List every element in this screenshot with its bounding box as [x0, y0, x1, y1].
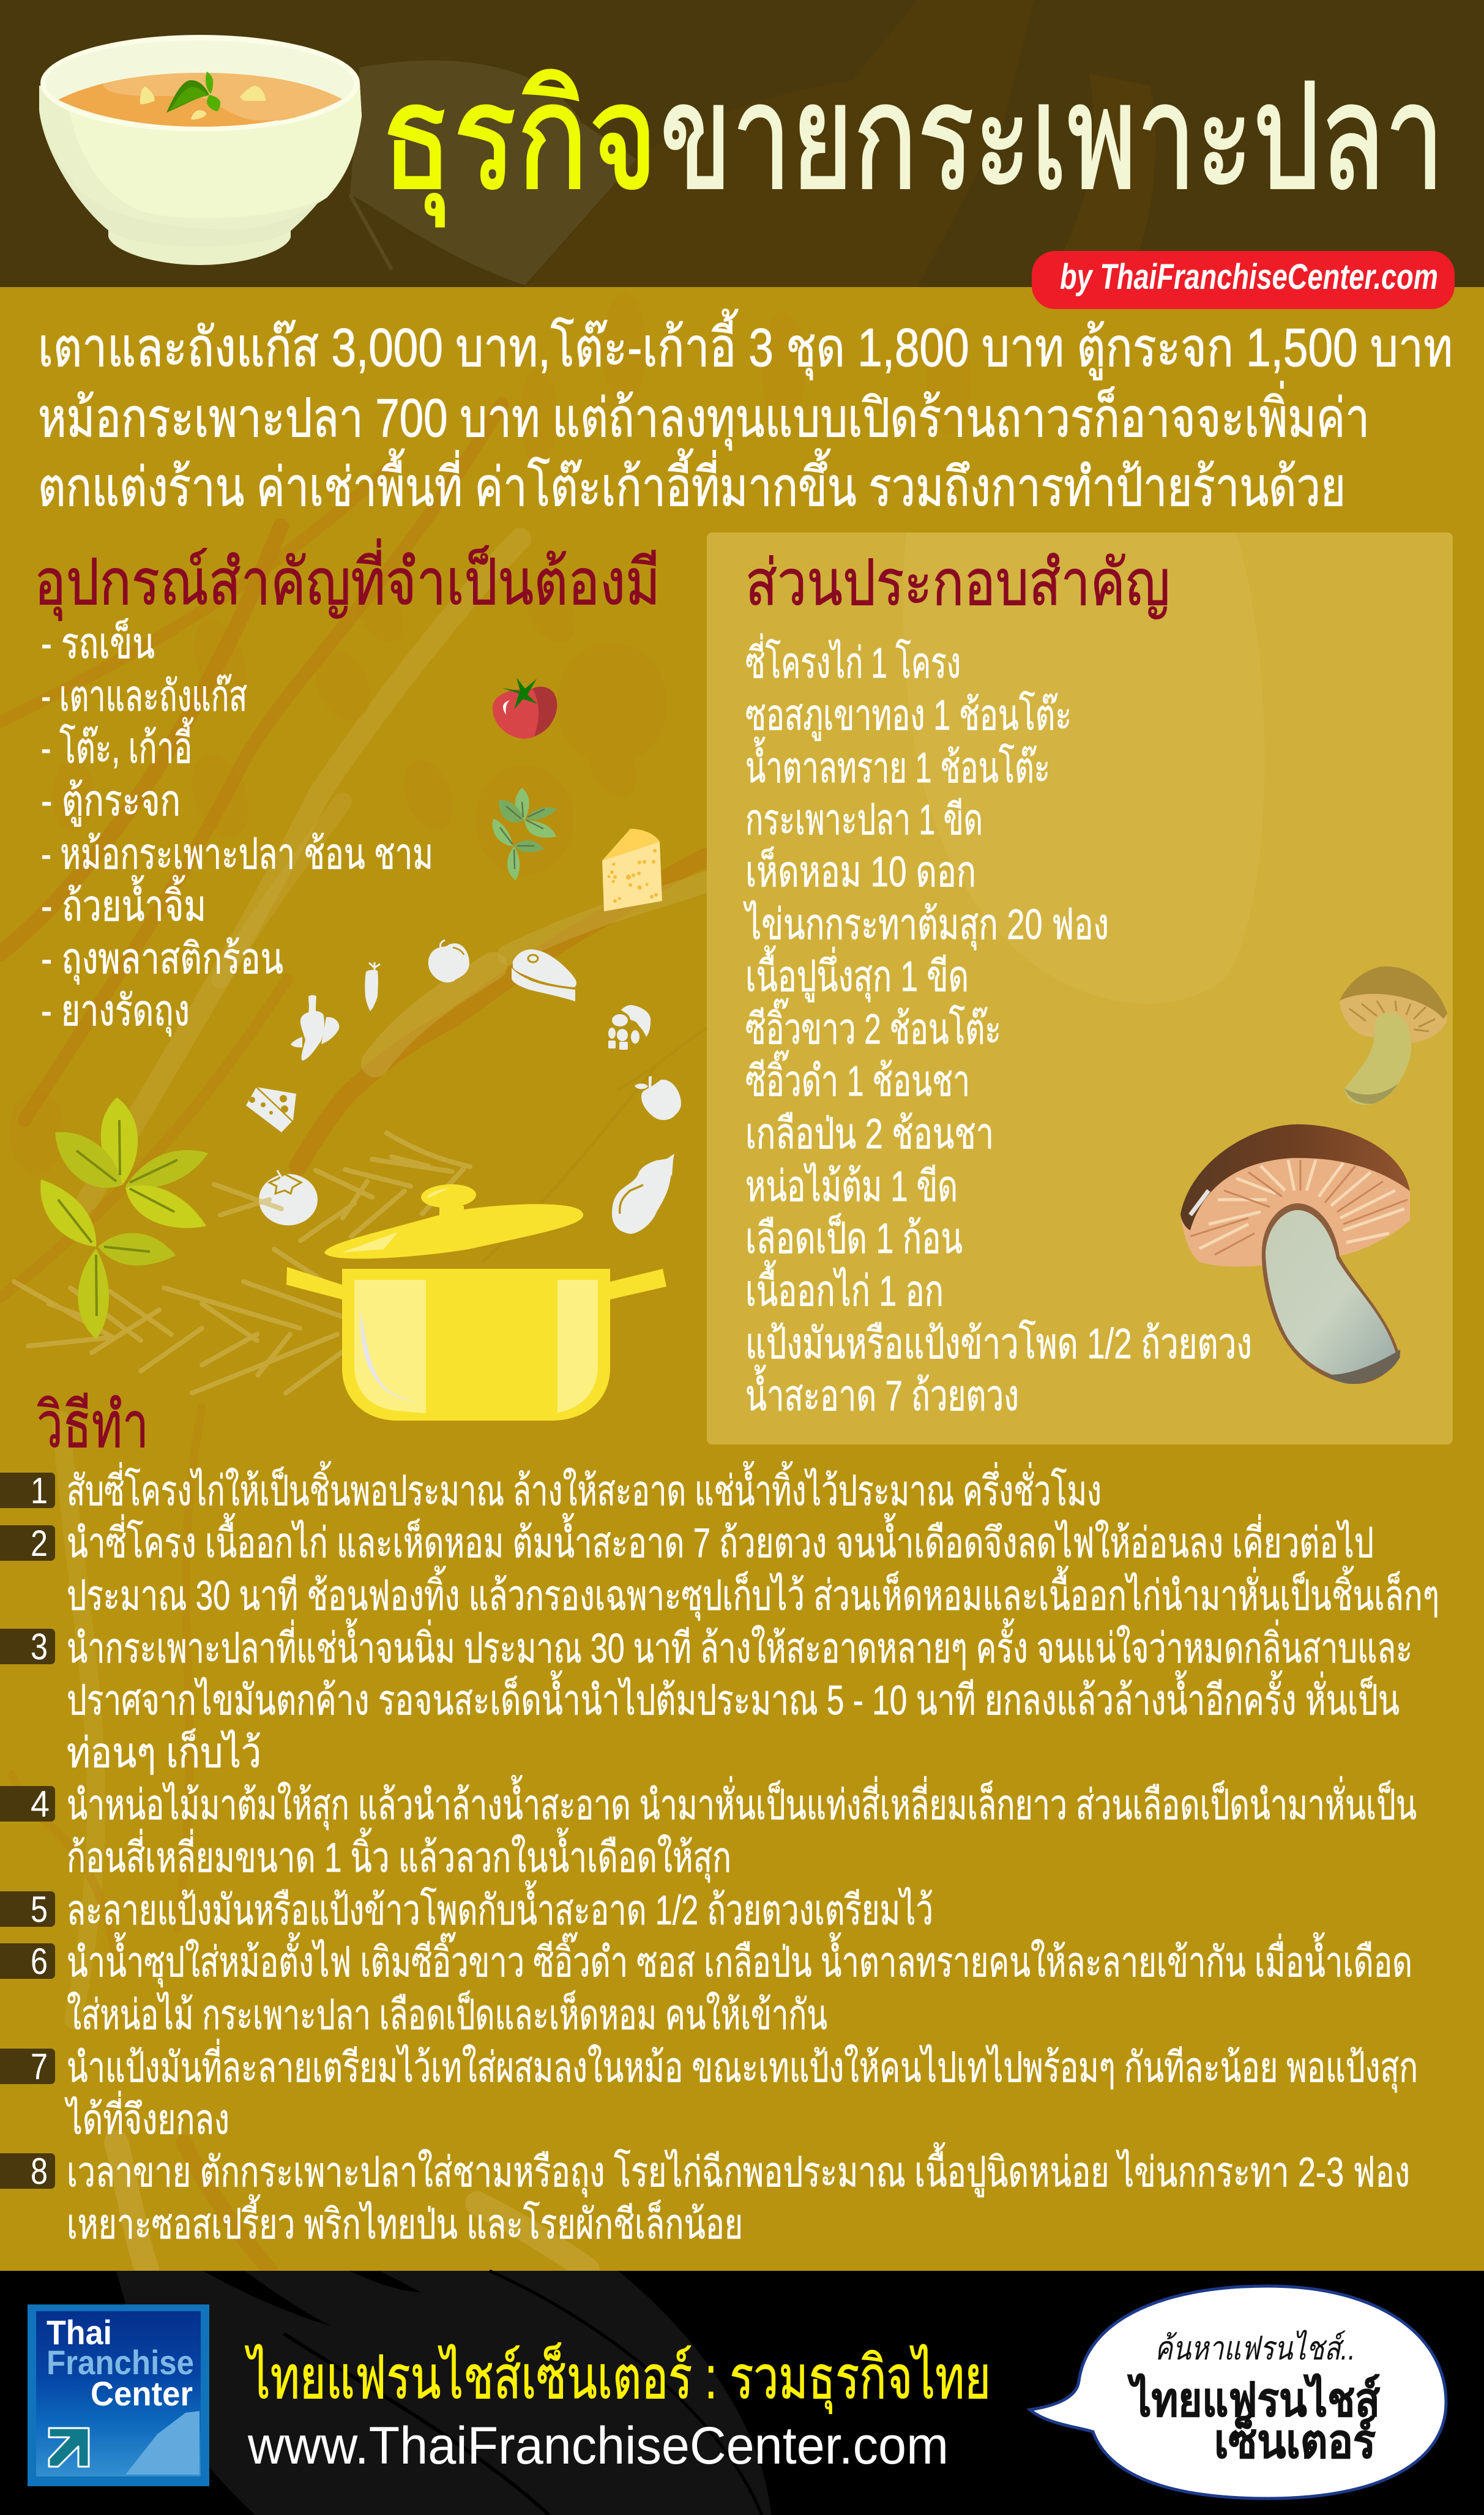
- heading: equipment: อุปกรณ์สำคัญที่จำเป็นต้องมี: [34, 539, 660, 621]
- icon: green herb leaves: [493, 788, 557, 880]
- step text: สับซี่โครงไก่ให้เป็นชิ้นพอประมาณ ล้างให้สะอาด แช่น้ำทิ้งไว้ประมาณ ครึ่งชั่วโมง: [67, 1461, 1102, 1514]
- logo wordmark: Thai: [47, 2313, 112, 2352]
- icon: carrot: [365, 962, 380, 1011]
- footer website url: www.ThaiFranchiseCenter.com: [247, 2416, 949, 2475]
- step number badges: 4: [31, 1784, 50, 1825]
- background watermark: stems and seeds: [0, 404, 707, 2270]
- icon: apple: [635, 1076, 681, 1120]
- ingredient items: ไข่นกกระทาต้มสุก 20 ฟอง: [743, 900, 1109, 951]
- icon: cheese wedge: [602, 829, 662, 911]
- icon: fruit: [428, 940, 469, 982]
- panel: ingredients: [707, 533, 1453, 1444]
- step text: ใส่หน่อไม้ กระเพาะปลา เลือดเป็ดและเห็ดหอม คนให้เข้ากัน: [67, 1990, 827, 2038]
- panel: equipment list: [34, 539, 660, 1037]
- bowl rim: [40, 35, 360, 132]
- rosemary sprigs: [14, 1133, 470, 1393]
- bubble text bold: [1127, 2373, 1381, 2468]
- equipment items: - ถ้วยน้ำจิ้ม: [41, 875, 206, 930]
- ingredient items: ซีอิ๊วดำ 1 ช้อนชา: [745, 1050, 970, 1105]
- equipment items: - โต๊ะ, เก้าอี้: [41, 717, 194, 772]
- step number badges: [0, 1470, 55, 2192]
- ingredient items: น้ำสะอาด 7 ถ้วยตวง: [745, 1364, 1019, 1419]
- intro text: [38, 309, 1453, 517]
- logo arrow: [49, 2428, 89, 2467]
- ingredient items: เนื้ออกไก่ 1 อก: [745, 1260, 944, 1315]
- heading: method: วิธีทำ: [37, 1390, 149, 1461]
- pot lid: [324, 1183, 583, 1258]
- icon: chili pepper: [291, 995, 339, 1061]
- icon: tomato outline: [259, 1170, 318, 1225]
- red byline pill: [1032, 251, 1455, 309]
- soup: [58, 73, 342, 127]
- speech bubble: [1030, 2286, 1446, 2498]
- background watermark: seeds: [10, 294, 971, 1175]
- equipment items: [41, 618, 433, 1037]
- bowl foot: [108, 228, 291, 265]
- icon: small mushroom: [1340, 966, 1447, 1105]
- header band: [0, 0, 1484, 287]
- ingredient items: ซีอิ๊วขาว 2 ช้อนโต๊ะ: [745, 998, 1001, 1053]
- step number badges: 1: [31, 1470, 48, 1511]
- ingredient items: [743, 633, 1252, 1419]
- step text: เหยาะซอสเปรี้ยว พริกไทยป่น และโรยผักชีเล็กน้อย: [67, 2194, 743, 2248]
- bowl icon: [39, 35, 362, 265]
- icon: large mushroom: [1180, 1124, 1410, 1384]
- pot handles: [286, 1267, 666, 1299]
- title: ธุรกิจ: [381, 55, 658, 226]
- icon: basil leaves: [40, 1097, 208, 1339]
- step text: ละลายแป้งมันหรือแป้งข้าวโพดกับน้ำสะอาด 1/2 ถ้วยตวงเตรียมไว้: [67, 1880, 933, 1934]
- header watermark: [350, 0, 1155, 287]
- footer band: [0, 2271, 1484, 2515]
- equipment items: - ยางรัดถุง: [41, 987, 190, 1037]
- heading: ingredients: ส่วนประกอบสำคัญ: [745, 548, 1170, 619]
- logo wordmark: Center: [91, 2374, 193, 2413]
- equipment items: - ถุงพลาสติกร้อน: [41, 935, 283, 985]
- ingredient items: เลือดเป็ด 1 ก้อน: [745, 1213, 963, 1262]
- step number badges: 7: [31, 2046, 48, 2087]
- ingredient items: หน่อไม้ต้ม 1 ขีด: [745, 1162, 958, 1210]
- step number badges: 3: [31, 1626, 48, 1667]
- panel: method steps: [0, 1461, 1439, 2248]
- icon: steak: [512, 949, 576, 1001]
- ingredient items: กระเพาะปลา 1 ขีด: [745, 796, 983, 843]
- logo: [28, 2304, 209, 2486]
- ingredient items: ซอสภูเขาทอง 1 ช้อนโต๊ะ: [745, 690, 1072, 741]
- white ingredient icons: [246, 940, 681, 1234]
- step number badges: 8: [31, 2151, 48, 2192]
- bubble text small: ค้นหาแฟรนไชส์..: [1155, 2330, 1355, 2367]
- equipment items: - รถเข็น: [41, 618, 155, 667]
- step number badges: 6: [31, 1941, 48, 1982]
- step text: ก้อนสี่เหลี่ยมขนาด 1 นิ้ว แล้วลวกในน้ำเดือดให้สุก: [67, 1828, 731, 1883]
- panel watermark: [903, 533, 1265, 1004]
- bubble text bold: ไทยแฟรนไชส์: [1127, 2373, 1381, 2426]
- icon: swiss cheese: [246, 1087, 296, 1132]
- equipment items: - เตาและถังแก๊ส: [41, 672, 247, 720]
- ingredient items: เห็ดหอม 10 ดอก: [745, 846, 976, 895]
- ingredient items: เกลือป่น 2 ช้อนชา: [745, 1110, 994, 1157]
- title: [381, 55, 1444, 226]
- equipment items: - หม้อกระเพาะปลา ช้อน ชาม: [41, 830, 433, 878]
- pot body: [342, 1269, 610, 1421]
- equipment items: - ตู้กระจก: [41, 777, 181, 827]
- step number badges: 5: [31, 1889, 48, 1930]
- icon: tomato: [493, 678, 557, 739]
- bubble text bold: เซ็นเตอร์: [1214, 2413, 1376, 2468]
- bowl body: [39, 84, 362, 247]
- logo wordmark: [47, 2313, 194, 2413]
- ingredient items: แป้งมันหรือแป้งข้าวโพด 1/2 ถ้วยตวง: [745, 1319, 1252, 1367]
- step text: ได้ที่จึงยกลง: [64, 2091, 229, 2143]
- footer watermark: [116, 2271, 771, 2515]
- footer yellow tagline: ไทยแฟรนไชส์เซ็นเตอร์ : รวมธุรกิจไทย: [245, 2342, 991, 2414]
- ingredient items: เนื้อปูนึ่งสุก 1 ขีด: [745, 945, 969, 1003]
- icon: eggplant: [612, 1154, 674, 1234]
- step text: ท่อนๆ เก็บไว้: [67, 1728, 261, 1776]
- icon: hops: [608, 1005, 651, 1050]
- ingredient items: น้ำตาลทราย 1 ช้อนโต๊ะ: [745, 736, 1050, 791]
- ingredient items: ซี่โครงไก่ 1 โครง: [745, 633, 961, 687]
- step number badges: 2: [31, 1523, 48, 1564]
- soup garnish: [140, 72, 266, 119]
- icon: yellow pot: [286, 1183, 666, 1421]
- logo wordmark: Franchise: [47, 2343, 194, 2382]
- logo streak: [125, 2411, 199, 2475]
- step text: [64, 1461, 1439, 2248]
